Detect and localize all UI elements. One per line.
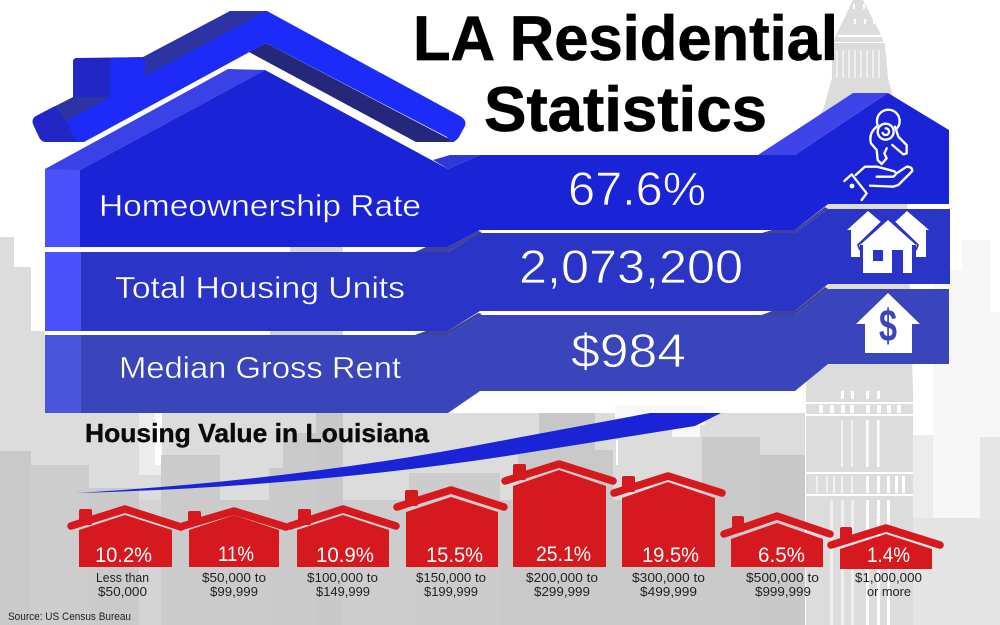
house: 300,000 to 499,999: $499,999 bbox=[640, 585, 697, 599]
house: 100,000 to 149,999 bbox=[290, 509, 396, 599]
house: 50,000 to 99,999: $99,999 bbox=[210, 585, 258, 599]
house: less than 50,000: Less than bbox=[96, 571, 149, 585]
house: less than 50,000 bbox=[71, 509, 181, 599]
label: Total Housing Units bbox=[115, 270, 405, 305]
house: 300,000 to 499,999: $300,000 to bbox=[632, 571, 705, 585]
house: 300,000 to 499,999 bbox=[614, 476, 722, 599]
house: 1,000,000 or more: or more bbox=[867, 585, 911, 599]
house: 100,000 to 149,999: $100,000 to bbox=[307, 571, 378, 585]
big ben tower bbox=[806, 0, 913, 625]
house: 50,000 to 99,999: $50,000 to bbox=[202, 571, 266, 585]
house: 200,000 to 299,999: $200,000 to bbox=[526, 571, 598, 585]
house: 1,000,000 or more: 1.4% bbox=[867, 544, 910, 567]
value: $984 bbox=[571, 324, 686, 377]
chart: housing value houses bbox=[71, 464, 940, 599]
title: LA Residential bbox=[413, 4, 838, 74]
swoosh arrow bbox=[76, 413, 721, 493]
panel: homeownership rate bbox=[45, 69, 949, 247]
house: 300,000 to 499,999: 19.5% bbox=[642, 544, 699, 567]
house roof bbox=[33, 11, 465, 142]
roof shadow side bbox=[33, 11, 267, 142]
house: 150,000 to 199,999 bbox=[397, 490, 504, 599]
heading: housing value: Housing Value in Louisiana bbox=[85, 418, 430, 448]
house: 100,000 to 149,999: 10.9% bbox=[316, 544, 374, 567]
house: 150,000 to 199,999: 15.5% bbox=[426, 544, 483, 567]
house: 500,000 to 999,999: $500,000 to bbox=[746, 571, 819, 585]
house: 1,000,000 or more bbox=[831, 527, 940, 599]
house: 150,000 to 199,999: $150,000 to bbox=[416, 571, 486, 585]
title: Statistics bbox=[484, 75, 767, 145]
house: less than 50,000: $50,000 bbox=[98, 585, 147, 599]
panel: total housing units bbox=[45, 207, 950, 331]
source: Source: US Census Bureau bbox=[8, 611, 131, 623]
house: 50,000 to 99,999: 11% bbox=[218, 543, 254, 566]
roof front bbox=[68, 11, 465, 142]
house: 500,000 to 999,999 bbox=[724, 516, 830, 599]
panel: median gross rent bbox=[45, 287, 949, 413]
label: Median Gross Rent bbox=[119, 350, 401, 385]
house: 200,000 to 299,999 bbox=[505, 464, 613, 599]
icon: keys in hand bbox=[844, 110, 912, 200]
chimney shadow bbox=[73, 58, 110, 97]
house: 50,000 to 99,999 bbox=[183, 511, 286, 599]
icon: dollar house: $ bbox=[879, 300, 897, 351]
house: 200,000 to 299,999: $299,999 bbox=[534, 585, 590, 599]
value: 2,073,200 bbox=[519, 240, 743, 293]
value: 67.6% bbox=[568, 162, 706, 215]
house: 500,000 to 999,999: $999,999 bbox=[755, 585, 811, 599]
icon: three houses bbox=[847, 211, 929, 273]
house: 100,000 to 149,999: $149,999 bbox=[316, 585, 370, 599]
label: Homeownership Rate bbox=[99, 188, 421, 223]
roof left end shadow bbox=[33, 106, 80, 142]
house: less than 50,000: 10.2% bbox=[95, 544, 152, 567]
house: 1,000,000 or more: $1,000,000 bbox=[855, 571, 922, 585]
house: 200,000 to 299,999: 25.1% bbox=[536, 543, 591, 566]
title bbox=[413, 4, 838, 145]
icon: dollar house bbox=[856, 293, 920, 353]
house: 150,000 to 199,999: $199,999 bbox=[424, 585, 478, 599]
roof underside bbox=[249, 43, 455, 142]
house: 500,000 to 999,999: 6.5% bbox=[758, 544, 805, 567]
